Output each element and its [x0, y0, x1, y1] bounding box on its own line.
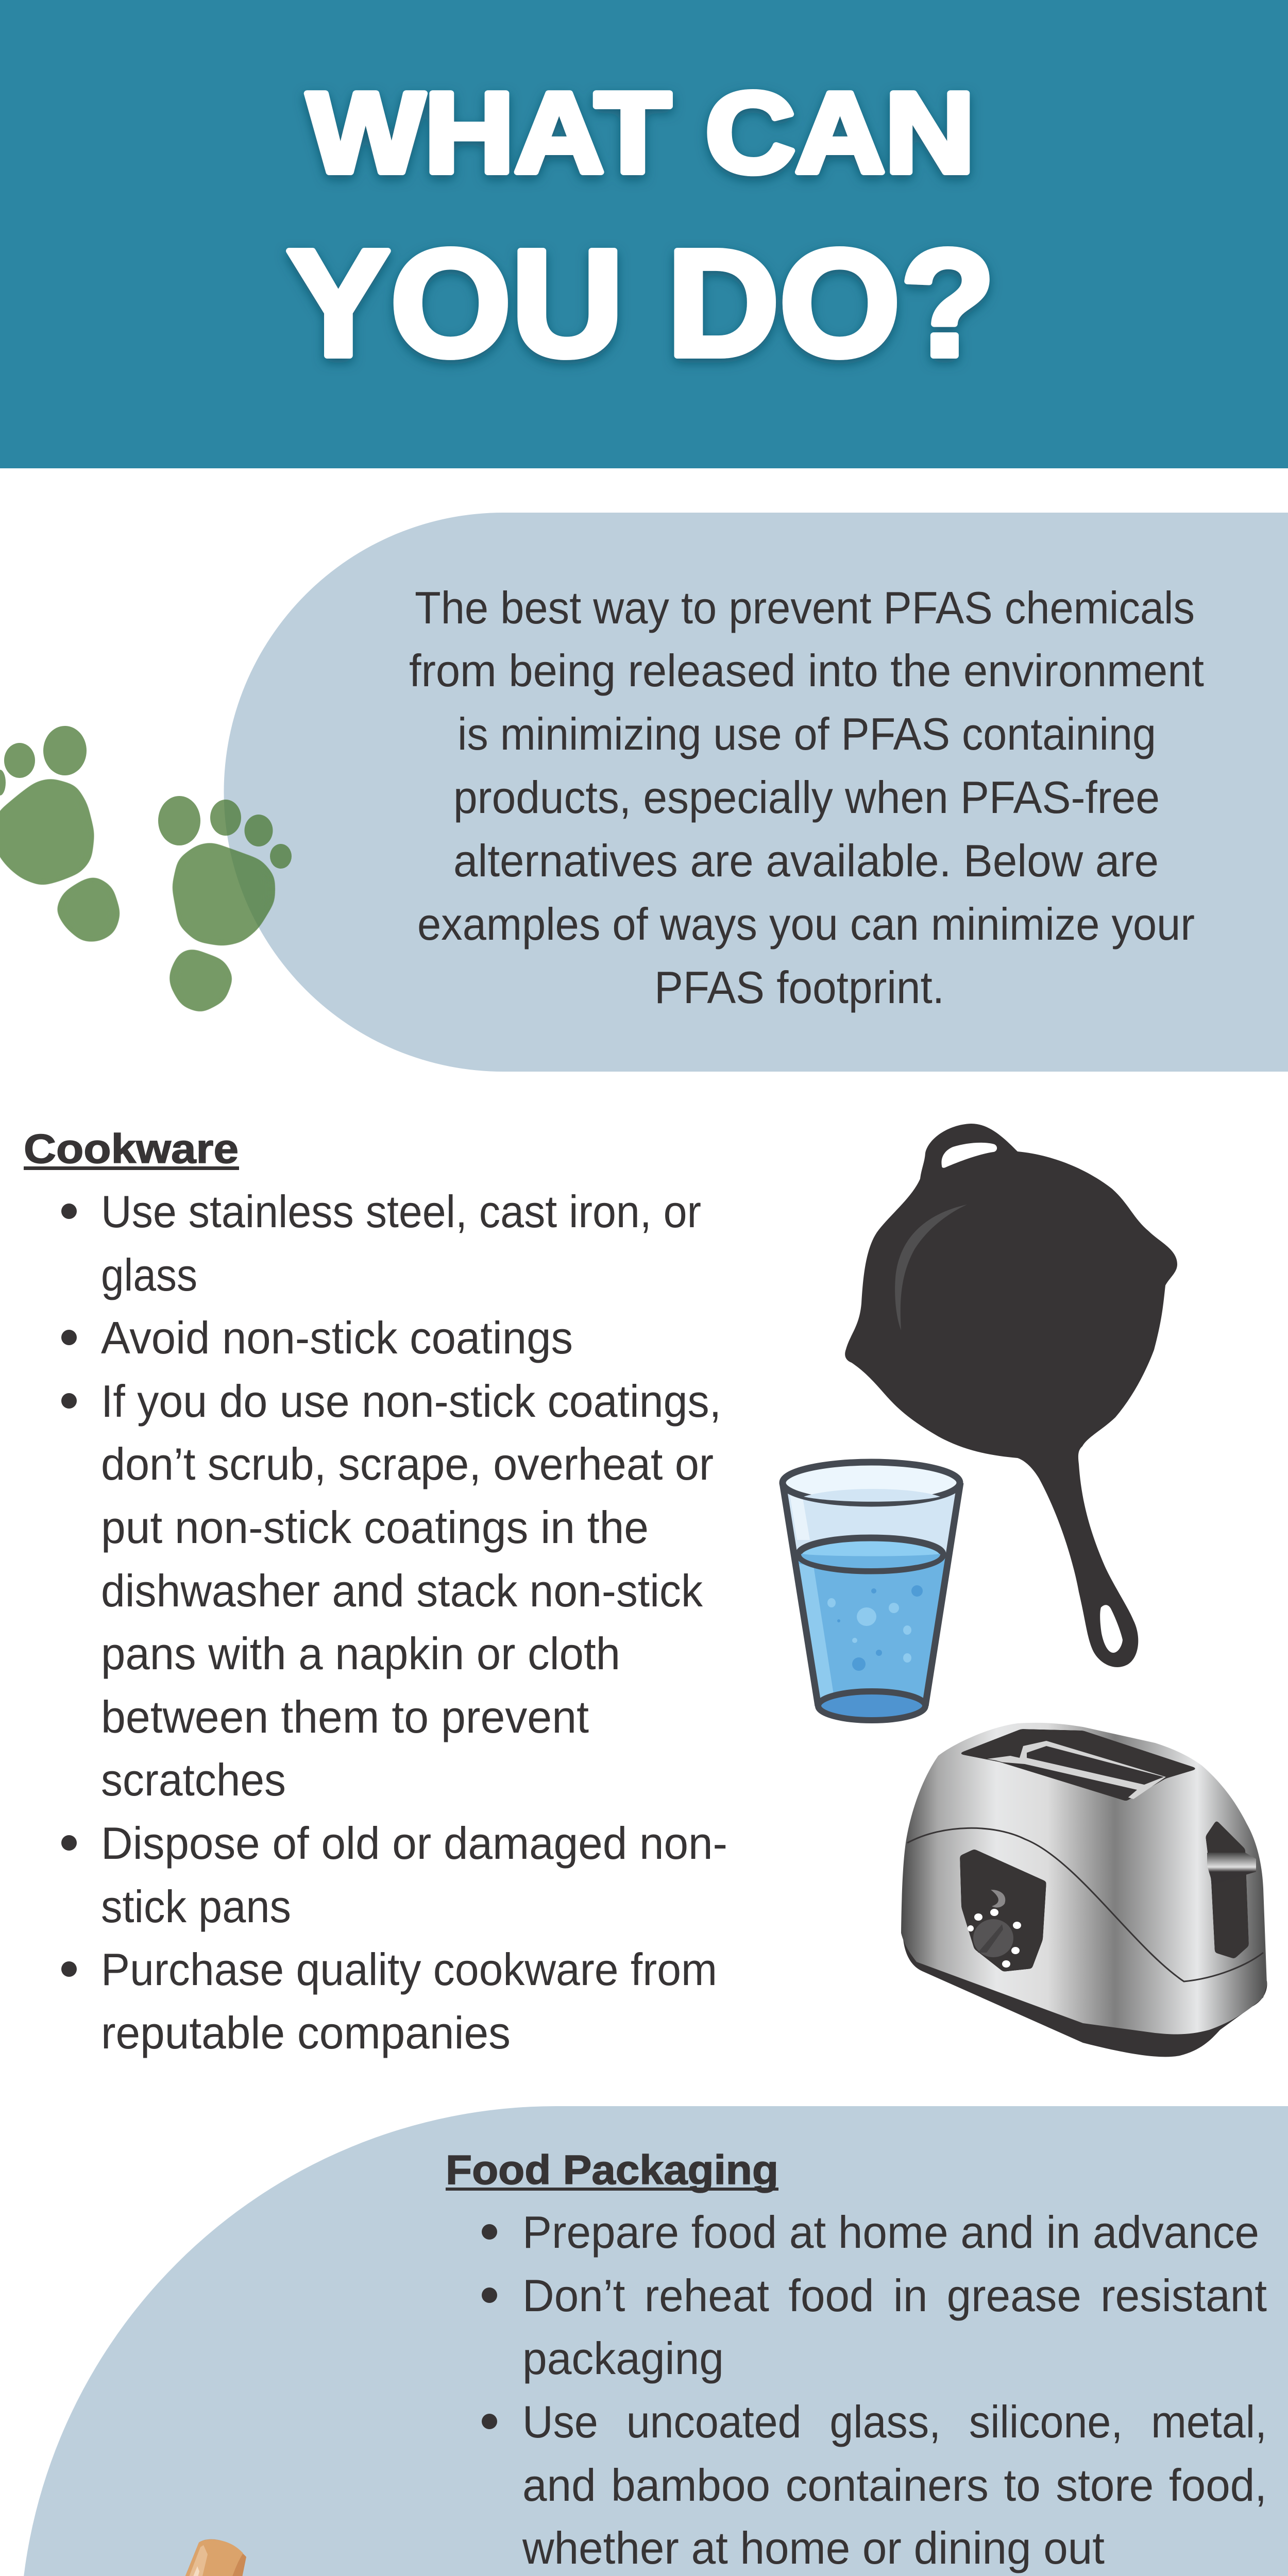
panel: cookware text [24, 1126, 727, 2058]
icon: footprints [0, 726, 292, 1013]
panel: intro [224, 513, 1288, 1072]
cookware bullet list: between them to prevent [101, 1691, 589, 1742]
food packaging bullet list: and bamboo containers to store food, [522, 2460, 1267, 2511]
icon: toaster [901, 1723, 1267, 2057]
intro paragraph: PFAS footprint. [654, 962, 944, 1013]
cookware bullet list: don’t scrub, scrape, overheat or [101, 1438, 714, 1489]
cookware bullet list [61, 1186, 727, 2058]
cookware bullet list: Use stainless steel, cast iron, or [101, 1186, 701, 1237]
header banner [0, 0, 1288, 468]
cookware bullet list: If you do use non-stick coatings, [101, 1376, 721, 1427]
icon: glass of water [783, 1462, 960, 1720]
intro paragraph [409, 582, 1204, 1013]
title: YOU DO? [286, 218, 995, 388]
intro paragraph: from being released into the environment [409, 645, 1204, 696]
right footprint [158, 796, 292, 1013]
intro paragraph: products, especially when PFAS-free [453, 772, 1160, 823]
intro paragraph: is minimizing use of PFAS containing [457, 708, 1156, 759]
icon: mortar and pestle [73, 2539, 440, 2576]
left footprint [0, 726, 121, 942]
cookware bullet list: Avoid non-stick coatings [101, 1312, 573, 1363]
intro background [224, 513, 1288, 1072]
panel: food packaging [20, 2106, 1288, 2576]
icon: cast iron skillet [845, 1124, 1177, 1667]
cookware bullet list: dishwasher and stack non-stick [101, 1565, 703, 1616]
cookware bullet list: glass [101, 1249, 197, 1300]
intro paragraph: examples of ways you can minimize your [417, 899, 1195, 950]
cookware bullet list: Purchase quality cookware from [101, 1944, 717, 1995]
food packaging bullet list [482, 2207, 1267, 2576]
food packaging bullet list: packaging [522, 2333, 724, 2384]
cookware bullet list: stick pans [101, 1881, 291, 1932]
food packaging heading: Food Packaging [446, 2147, 778, 2193]
cookware bullet list: Dispose of old or damaged non- [101, 1818, 727, 1869]
food packaging background [20, 2106, 1288, 2576]
cookware bullet list: put non-stick coatings in the [101, 1502, 649, 1553]
food packaging bullet list: Prepare food at home and in advance [522, 2207, 1259, 2258]
intro paragraph: alternatives are available. Below are [453, 835, 1159, 886]
cookware heading: Cookware [24, 1126, 239, 1172]
title [286, 69, 995, 388]
intro paragraph: The best way to prevent PFAS chemicals [415, 582, 1195, 633]
pestle [105, 2539, 246, 2576]
title: WHAT CAN [307, 69, 975, 197]
cookware bullet list: reputable companies [101, 2007, 511, 2058]
cookware bullet list: scratches [101, 1754, 286, 1805]
food packaging bullet list: Don’t reheat food in grease resistant [522, 2270, 1267, 2321]
cookware bullet list: pans with a napkin or cloth [101, 1628, 620, 1679]
food packaging bullet list: whether at home or dining out [522, 2522, 1105, 2573]
